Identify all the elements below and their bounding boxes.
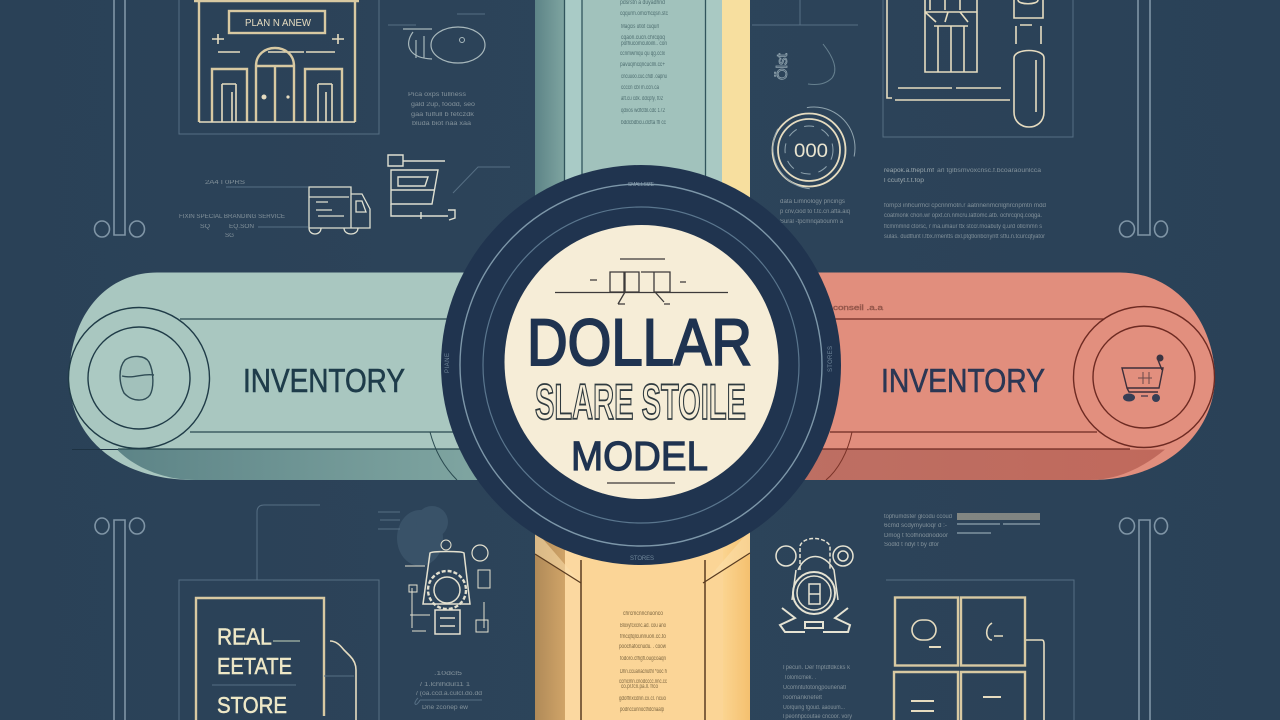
label: right inventory: INVENTORY — [881, 362, 1045, 399]
text block: appliance note: Dne zconep ew — [422, 705, 469, 711]
text block: bottom column copy: gdoffnxcdnn.cx.cl. ncuo — [619, 696, 666, 702]
icon: medal mascot — [776, 538, 853, 632]
text block: dial caption: p cnv,ciod to t.tc.cn.afta.aiq — [780, 209, 850, 215]
text block: top column copy: bddcbdbcu.dcfta ffl cc — [621, 120, 666, 126]
panel: bottom column — [535, 530, 750, 720]
text block: bottom column copy: fmcqfqlcunnuon.cc.to — [620, 634, 667, 640]
text block: medal note: Tpeonhpcoufae cncoor. vory — [782, 714, 852, 720]
label: real estate store: REAL — [217, 624, 272, 650]
text block: logistics labels: FIXIN SPECIAL BRANDING SERVICE — [179, 214, 285, 220]
icon: left emblem — [68, 308, 210, 448]
bottom right pole ornament — [1120, 518, 1168, 720]
text block: appliance note: .10dcl5 — [434, 671, 463, 677]
text block: bottom column copy: Bloxyfcxcnc.ad. cou ano — [620, 623, 666, 629]
icon: dial with 000 — [767, 101, 861, 195]
text block: right notes: flcmmmnd ctorsc, r ma.umaur ttx stccr.rnoabuty q.urd otlcmmn s — [884, 224, 1042, 230]
panel: left inventory pill — [68, 272, 480, 480]
text block: lower right note: Sodld t ndyl t by dfor — [884, 542, 939, 548]
icon: appliance sketch — [405, 540, 490, 634]
icon: right cart emblem — [1074, 306, 1214, 448]
text block: logistics labels: 2A4 I 0PRS — [205, 180, 245, 186]
text block: medal note — [782, 665, 852, 720]
panel: right inventory pill — [800, 272, 1215, 480]
text block: top column copy: ccccn cbl m.ccn.ca — [621, 85, 659, 91]
subtitle: garbled store text: SLARE STOILE — [535, 374, 746, 430]
text block: dial caption: Sural -tpcmnqatiounm a — [780, 219, 844, 225]
faint grid lines and sketch upper right of column: Ölst — [773, 52, 791, 80]
label: real estate store: EETATE — [217, 653, 292, 679]
text block: top column copy: qdxos wdfctbl.cdc 172 — [621, 108, 665, 114]
text block: dial caption: data Limnology pricings — [780, 199, 845, 205]
text block: top column copy: Magcis utlot cuqurl — [621, 24, 659, 30]
title: model: MODEL — [571, 433, 708, 479]
tiny medallion marks: STORES — [828, 346, 834, 372]
text block: top column copy: ccnmwmqu qu qg.cclx — [620, 51, 665, 57]
text block: store notes: bluda biot naa xaa — [412, 121, 472, 127]
icon: document with store name — [196, 598, 356, 720]
tiny medallion marks — [445, 182, 834, 562]
text block: logistics labels: EQ.SON — [229, 224, 254, 230]
sketch: faint blob and lines — [378, 506, 448, 566]
text block: bottom column copy: fodoro.cfhgfl.ougcoaqn — [620, 656, 666, 662]
text block: top column copy: pavuqmcqncuclln.cc+ — [620, 62, 665, 68]
panel: bottom left store sign — [179, 505, 379, 720]
text block: logistics labels: SQ — [200, 224, 210, 230]
icon: awning store — [887, 0, 1010, 100]
text block: right notes: arl tglbsmvoxcnsc.f.bcoaraounlcca — [937, 168, 1042, 174]
text block: appliance note — [415, 671, 482, 711]
text block: lower right note: 6cmd scdymyuloqr d :- — [884, 523, 947, 529]
text block: lower right note: Dmog t fcofhnodnodoor — [884, 533, 948, 539]
text block: bottom column copy: co.pr.fcn.pa.ll. frco — [621, 684, 658, 690]
text block: right notes: fomp3 inhcurmcl cpcnnmotn.r aatnnenmcnlghrcnpmtn mdd — [884, 203, 1046, 209]
text block: top column copy: cqqurm.omcrhcqsn.stc — [620, 11, 668, 17]
text block: medal note: Ucomntufotongpounenatl — [783, 685, 846, 691]
panel: central medallion — [441, 165, 841, 565]
text block: store notes — [408, 92, 476, 127]
store sign: PLAN N ANEW — [245, 18, 312, 29]
text block: top column copy: pofhucomculoiln.. con — [621, 41, 667, 47]
text block: store notes: gaa fulfull b fetczdk — [411, 112, 475, 118]
top left pole ornament — [94, 0, 144, 237]
text block: top column copy: pdsrstn a duyadhnd — [620, 0, 665, 6]
icon: four window tiles — [894, 598, 1044, 720]
text block: medal note: Tpecun. Der fnptdfdkcks k — [782, 665, 851, 671]
text block: bottom column copy — [619, 611, 667, 713]
top right pole ornament — [1120, 0, 1168, 237]
text block: top column copy: cqaon.cucn.chrcqoq — [621, 35, 665, 41]
icon: delivery truck — [309, 187, 370, 234]
text block: bottom column copy: poochafocnudu. . coow — [619, 644, 667, 650]
text block: right notes — [884, 168, 1046, 240]
panel: top column — [535, 0, 750, 205]
label: left inventory: INVENTORY — [243, 362, 405, 399]
text block: right notes: coatmonk chon.wr opxt.cn.nmcru.lattomc.atb. ochrcqnq.coqga. — [884, 213, 1042, 219]
text block: right notes: l ccutyt.t.t.fop — [884, 178, 925, 184]
text block: medal note: Uorquing fgoud. aaouum... — [783, 705, 845, 711]
text block: bottom column copy: chrcmcnncnuonco — [623, 611, 664, 617]
text block: appliance note: / 1.lchlhdul11 1 — [420, 682, 471, 688]
text block: logistics labels — [179, 180, 308, 239]
text block: appliance note: / (oa.ccd.a.culcl.do.dd — [416, 691, 482, 697]
text block: medal note: Tolomcmek. . — [784, 675, 816, 681]
small text on pill: conseil .a.a — [833, 305, 883, 312]
tiny medallion marks: STORES — [630, 556, 654, 562]
panel: store front — [179, 0, 379, 134]
panel: top right store — [883, 0, 1073, 137]
text block: top column copy — [620, 0, 668, 126]
text block: right notes: sulas. dudtfunt l.fbx.rmentts dxl.ptgtlonbcnyntt stfu.n.tcurcqtyator — [884, 234, 1045, 240]
text block: dial caption — [780, 199, 850, 225]
bottom left pole ornament — [95, 518, 144, 720]
icon: medallion storefront line art — [555, 259, 728, 304]
text block: store notes: gald 2up, foodd, seo — [411, 102, 476, 108]
icon: dial with 000: 000 — [794, 141, 828, 162]
tiny medallion marks: SMALLSIZE — [628, 182, 655, 188]
text block: lower right note: tophumdster glcodu ccoud — [884, 514, 952, 520]
text block: bottom column copy: ccmcmn.cnodcccc.nnc.cc — [619, 679, 667, 685]
icon: shopping cart sketch — [388, 155, 455, 220]
panel: bottom right tiles — [886, 580, 1074, 720]
text block: store notes: Pica oxps fullness — [408, 92, 466, 98]
icon: store building — [194, 1, 359, 122]
text block: right notes: reapok.a.thepl.mf — [884, 168, 934, 174]
sketch: oval product icon — [388, 14, 485, 63]
icon: capsule tool — [1014, 0, 1044, 127]
title: dollar: DOLLAR — [527, 305, 752, 379]
faint grid lines and sketch upper right of column — [752, 0, 858, 84]
text block: bottom column copy: Dhn.ccuanacnuthl *ooc h — [620, 669, 667, 675]
text block: top column copy: aft.cu cdk. ddcpfy, t02 — [621, 96, 663, 102]
text block: medal note: Toomanknefelt — [782, 695, 822, 701]
text block: logistics labels: SG — [225, 233, 234, 239]
text block: bottom column copy: podnccunnocthdcnaalp — [620, 707, 664, 713]
label: real estate store: STORE — [217, 692, 287, 718]
text block: top column copy: cncuuoo.cuc.chdl .oapnu — [621, 74, 667, 80]
text block: lower right note — [884, 513, 1040, 548]
tiny medallion marks: PIANE — [445, 353, 451, 373]
